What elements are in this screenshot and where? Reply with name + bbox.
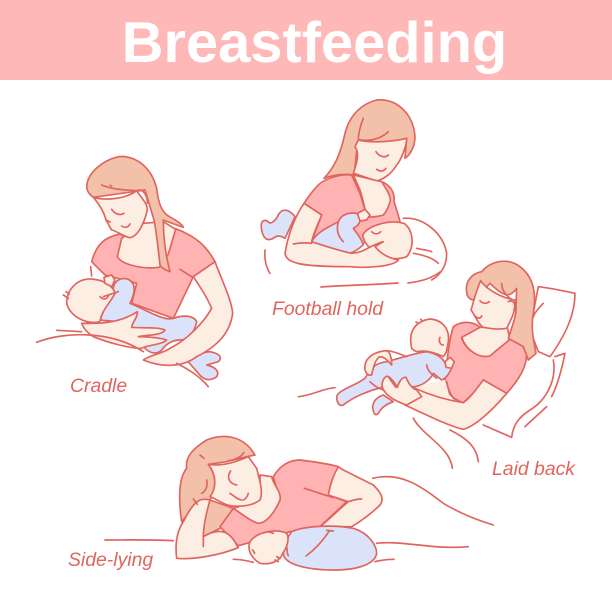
face details and hair strands <box>102 185 193 277</box>
baby face details <box>63 267 118 299</box>
mother neck and chest <box>117 222 176 268</box>
mother face <box>471 281 515 329</box>
baby swaddle <box>283 526 377 570</box>
mother hair <box>324 100 415 178</box>
baby body <box>312 213 363 253</box>
mother hand on back <box>365 351 392 375</box>
arm crease <box>293 243 312 244</box>
baby head <box>411 319 449 357</box>
cradling hand and forearm <box>82 312 167 348</box>
mother hair <box>180 436 255 537</box>
baby face details <box>253 532 280 562</box>
upper arm line <box>387 351 407 387</box>
label: Side-lying: Side-lying <box>68 549 153 571</box>
baby hand <box>104 275 115 287</box>
supporting arm <box>176 499 238 559</box>
panel: football hold <box>261 100 447 287</box>
face details <box>200 452 248 500</box>
panel: laid back <box>298 261 575 468</box>
baby eye <box>372 232 381 234</box>
mother far arm <box>415 380 463 403</box>
mother face <box>208 457 261 506</box>
header band <box>0 0 612 80</box>
baby head <box>363 222 412 259</box>
label: Football hold: Football hold <box>272 298 384 320</box>
pillow <box>265 218 447 287</box>
mother arms <box>143 262 233 365</box>
label: Laid back: Laid back <box>492 458 576 480</box>
baby ear and hair <box>416 319 443 345</box>
mother hair <box>87 157 183 272</box>
baby feet <box>187 352 220 380</box>
face details <box>447 283 515 400</box>
mother neck <box>233 475 280 523</box>
mother face <box>93 191 147 238</box>
arm crease <box>193 499 203 547</box>
title: Breastfeeding <box>122 11 507 75</box>
mother arm and hand <box>285 203 398 267</box>
mother shirt <box>220 460 347 546</box>
baby head <box>249 531 288 564</box>
upper pillow <box>530 287 575 357</box>
baby body fold <box>337 222 343 242</box>
baby head <box>67 279 115 322</box>
baby body <box>101 279 197 353</box>
mother upper arm <box>320 467 382 527</box>
baby body folds <box>370 365 437 390</box>
baby lower leg <box>373 395 393 415</box>
bed lines <box>105 477 493 562</box>
swaddle folds <box>287 530 333 556</box>
mother face <box>353 138 407 181</box>
pillow and sheet lines <box>298 303 565 468</box>
baby body <box>337 352 453 405</box>
mother hand on belly <box>382 376 422 405</box>
mother shirt <box>445 322 527 403</box>
mother hair <box>466 261 536 360</box>
panel: side-lying <box>105 436 493 570</box>
baby hand <box>445 357 454 368</box>
baby legs and feet <box>261 210 295 240</box>
label: Cradle: Cradle <box>70 375 127 397</box>
mother chest <box>462 327 510 356</box>
mother forearm <box>405 380 507 429</box>
blanket lines <box>37 330 208 387</box>
face details <box>358 118 388 171</box>
mother shirt <box>304 175 400 243</box>
shirt fold and elbow crease <box>304 488 362 502</box>
mother shirt <box>92 229 215 318</box>
mother chest <box>353 175 390 217</box>
panel: cradle hold <box>37 157 233 387</box>
baby hand <box>357 209 370 221</box>
